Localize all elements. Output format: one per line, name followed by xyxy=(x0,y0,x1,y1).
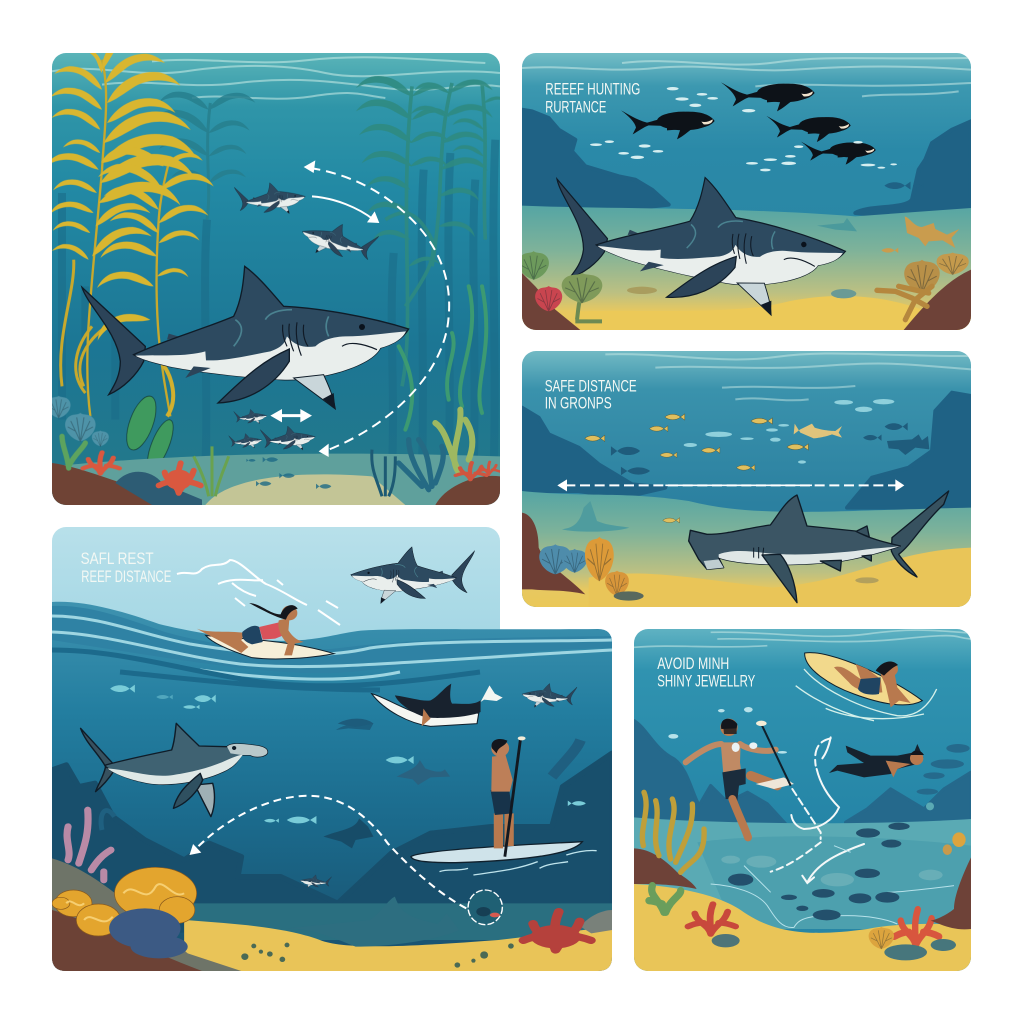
water background xyxy=(634,629,971,971)
label: SHINY JEWELLRY xyxy=(657,671,755,690)
small grey shark xyxy=(522,683,577,707)
panel: surfers and paddleboarder xyxy=(52,600,612,971)
panel: avoid shiny jewellery xyxy=(634,629,971,971)
dark silhouette fish xyxy=(611,423,929,475)
snorkeler with paddle xyxy=(686,719,794,837)
water background xyxy=(522,53,971,330)
rocks and corals right xyxy=(372,410,500,505)
pebbles xyxy=(241,943,514,968)
sand xyxy=(634,884,971,971)
water background xyxy=(522,351,971,607)
light fish top xyxy=(110,685,373,727)
hammerhead shark xyxy=(81,723,267,817)
left reef and corals xyxy=(52,810,241,971)
yellow fish xyxy=(585,414,808,523)
label: AVOID MINH xyxy=(657,654,729,673)
black wetsuit diver xyxy=(829,744,924,777)
sand smudge xyxy=(855,577,879,583)
corals on sand xyxy=(688,832,971,960)
dark cloud fish xyxy=(917,744,970,795)
panel: safe distance in groups xyxy=(522,351,971,607)
highlighted circle xyxy=(468,890,502,925)
surface ripples xyxy=(52,57,500,99)
arrowheads xyxy=(270,160,379,457)
silhouette fish xyxy=(884,182,910,190)
label xyxy=(545,380,636,408)
dashed distance arrow xyxy=(557,479,904,491)
distant hills xyxy=(522,408,665,498)
surfer on board xyxy=(796,653,937,721)
surface shark xyxy=(349,543,477,605)
great white shark xyxy=(82,266,409,409)
lower green blades right xyxy=(399,286,486,430)
surface ripples xyxy=(634,630,971,647)
green broad leaves xyxy=(126,396,174,459)
silhouette on sand xyxy=(562,501,629,532)
red coral right xyxy=(523,910,612,950)
white arrows xyxy=(771,737,864,883)
label xyxy=(81,549,171,586)
water background xyxy=(52,600,612,971)
dashed route arrow xyxy=(189,796,466,908)
surface ripples xyxy=(522,58,971,96)
label: SAFE DISTANCE xyxy=(545,377,637,396)
label: RURTANCE xyxy=(545,97,606,116)
label: REEEF HUNTING xyxy=(545,80,640,99)
panel: kelp forest with great white shark xyxy=(45,26,509,505)
seafloor band xyxy=(184,903,612,940)
rock and corals left xyxy=(518,251,602,330)
light fish xyxy=(264,756,586,824)
seabed sand xyxy=(184,920,612,971)
dark fish xyxy=(323,722,450,848)
silhouette on seabed xyxy=(817,218,857,231)
small tan shark xyxy=(905,216,959,248)
hammerhead shark xyxy=(689,491,949,603)
surface ripples xyxy=(605,353,971,400)
left reef and kelp xyxy=(634,792,704,912)
tan fish xyxy=(881,248,898,253)
sand shark silhouette xyxy=(288,897,459,947)
green kelp right xyxy=(356,68,509,386)
diver on white board xyxy=(372,684,503,726)
seabed xyxy=(522,206,971,330)
label xyxy=(657,654,755,690)
surfer on wave xyxy=(197,603,334,659)
water background xyxy=(52,53,500,505)
small silver shark xyxy=(300,875,332,888)
white pool lines xyxy=(711,846,954,927)
mid teal kelp xyxy=(159,92,255,220)
pale pool shapes xyxy=(721,856,943,886)
tan small shark xyxy=(794,424,842,438)
reef shark xyxy=(556,176,846,316)
distant hills xyxy=(522,110,669,210)
distant reef silhouettes xyxy=(52,753,612,930)
label: REEF DISTANCE xyxy=(81,567,171,586)
stones xyxy=(627,287,856,298)
panel: surface sky xyxy=(52,527,500,652)
wake lines xyxy=(439,851,597,875)
small seabed fish xyxy=(246,457,331,489)
seabed xyxy=(522,491,971,607)
label: SAFL REST xyxy=(81,549,154,568)
fish school xyxy=(728,823,910,920)
label: IN GRONPS xyxy=(545,393,612,412)
paddleboarder xyxy=(411,736,582,863)
white wave lines xyxy=(177,560,340,625)
small sharks xyxy=(234,183,305,214)
light bubbles xyxy=(668,707,934,810)
lower kelp blades left xyxy=(162,363,173,416)
panel: reef hunting xyxy=(518,53,971,330)
rock and corals xyxy=(522,513,644,601)
rock and corals right xyxy=(877,252,971,330)
yellow kelp left xyxy=(45,26,214,416)
light fish and clouds xyxy=(684,399,894,464)
black sharks xyxy=(621,82,876,165)
seabed pool xyxy=(634,817,971,929)
dashed circling arrows xyxy=(279,168,449,450)
label xyxy=(546,83,640,112)
seabed xyxy=(52,454,500,505)
rocks and corals left xyxy=(47,396,229,505)
distant hills xyxy=(634,721,786,824)
background dark kelp columns xyxy=(58,140,500,332)
fish school xyxy=(590,87,897,171)
surface wave bands xyxy=(52,606,612,690)
